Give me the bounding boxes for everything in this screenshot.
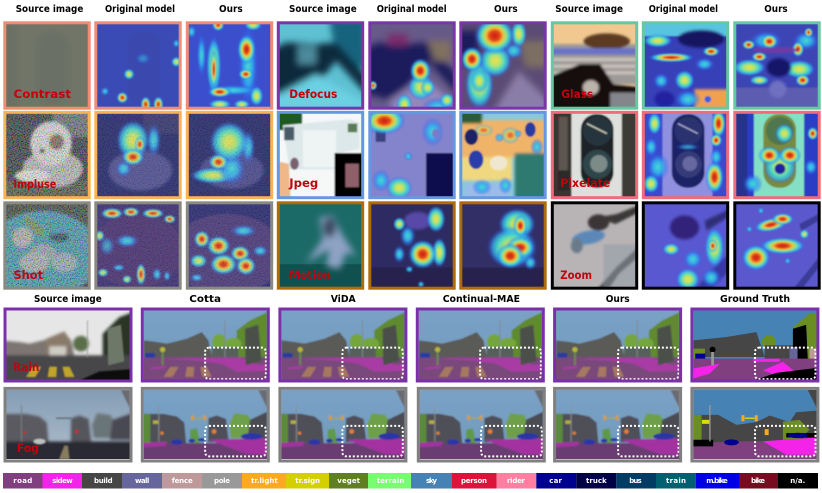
column headings: segmentation row: Continual-MAE [443, 294, 520, 305]
panel: glass source [547, 17, 642, 114]
panel: fog Continual-MAE [413, 383, 550, 466]
panel: contrast ours heatmap [182, 17, 277, 114]
panel: shot ours heatmap [170, 197, 284, 294]
panel: shot source [0, 197, 99, 298]
panel: shot original model heatmap [90, 197, 186, 294]
panel: jpeg ours heatmap [455, 107, 551, 203]
column headings: segmentation row: Ground Truth [720, 294, 790, 305]
panel: defocus source [270, 17, 370, 118]
panel: impulse original model heatmap [90, 107, 186, 203]
panel: fog Cotta [137, 383, 274, 466]
highlight box [618, 348, 679, 379]
legend: class colour bar: m.bike [706, 477, 728, 485]
label: Impluse: Impluse [14, 177, 56, 191]
legend: class colour bar [3, 473, 818, 488]
panel: defocus ours heatmap [455, 17, 552, 114]
legend: class colour bar: person [461, 477, 487, 485]
legend: class colour bar: terrain [377, 477, 404, 485]
label: Jpeg: Jpeg [288, 176, 318, 190]
highlight box [755, 426, 815, 456]
column headings: first panel set: Original model [105, 4, 175, 15]
column headings: segmentation row: ViDA [331, 294, 356, 305]
column headings: third panel set: Source image [555, 4, 623, 15]
panel: contrast original model heatmap [90, 17, 186, 114]
panel: motion ours heatmap [455, 197, 551, 294]
panel: motion original model heatmap [364, 197, 460, 294]
legend: class colour bar: pole [214, 477, 230, 485]
legend: class colour bar: road [13, 477, 32, 485]
panel: rain Continual-MAE [412, 304, 549, 387]
label: Fog: Fog [17, 441, 39, 455]
panel: rain Cotta [137, 304, 274, 387]
column headings: third panel set: Ours [764, 4, 788, 15]
panel: rain ViDA [275, 304, 411, 387]
highlight box [342, 348, 403, 379]
label: Shot: Shot [14, 268, 43, 282]
legend: class colour bar: wall [135, 477, 149, 485]
label: Glass: Glass [561, 87, 593, 101]
legend: class colour bar: sidew [52, 477, 73, 485]
highlight box [480, 348, 541, 379]
label: Contrast: Contrast [14, 87, 72, 101]
label: Zoom: Zoom [560, 268, 592, 282]
column headings: second panel set: Ours [494, 4, 518, 15]
panel: rain Ours [549, 304, 686, 387]
column headings: third panel set: Original model [649, 4, 718, 15]
label: Motion: Motion [289, 268, 331, 282]
legend: class colour bar: veget [337, 477, 361, 485]
legend: class colour bar: tr.light [251, 477, 278, 485]
highlight box [342, 426, 403, 456]
panel: motion source [273, 197, 368, 294]
column headings: first panel set: Ours [219, 4, 243, 15]
highlight box [755, 348, 815, 379]
highlight box [481, 426, 542, 456]
legend: class colour bar: tr.sign [295, 477, 320, 485]
label: Rain: Rain [13, 360, 39, 374]
legend: class colour bar: bike [751, 477, 765, 485]
panel: fog source [0, 383, 136, 466]
panel: zoom original model heatmap [638, 197, 733, 294]
panel: impulse source [0, 107, 95, 203]
legend: class colour bar: fence [172, 477, 193, 485]
column headings: third panel set [555, 4, 788, 15]
panel: pixelate source [547, 107, 642, 203]
panel: jpeg source [273, 107, 368, 203]
legend: class colour bar: n/a. [790, 477, 805, 485]
column headings: segmentation row: Cotta [189, 294, 221, 305]
legend: class colour bar: sky [426, 477, 437, 485]
panel: fog ViDA [275, 383, 411, 466]
column headings: second panel set [289, 4, 518, 15]
panel: glass original model heatmap [638, 17, 733, 114]
highlight box [205, 348, 266, 379]
panel: fog ground truth [692, 388, 818, 461]
legend: class colour bar: bus [629, 477, 642, 485]
column headings: segmentation row: Ours [606, 294, 630, 305]
panel: rain ground truth [692, 309, 818, 381]
panel: pixelate ours heatmap [729, 107, 822, 203]
panel: impulse ours heatmap [182, 107, 277, 203]
label: Pixelate: Pixelate [560, 176, 610, 190]
panel: glass ours heatmap [729, 17, 822, 114]
legend: class colour bar: truck [586, 477, 607, 485]
column headings: segmentation row [34, 294, 790, 305]
panel: zoom ours heatmap [729, 197, 822, 294]
panel: zoom source [547, 197, 642, 294]
panel: defocus original model heatmap [361, 17, 461, 118]
panel: contrast source [0, 14, 98, 117]
highlight box [618, 426, 679, 456]
column headings: second panel set: Original model [377, 4, 447, 15]
column headings: segmentation row: Source image [34, 294, 102, 305]
highlight box [205, 426, 266, 456]
panel: jpeg original model heatmap [363, 107, 460, 203]
legend: class colour bar: train [666, 477, 686, 485]
legend: class colour bar: car [549, 477, 563, 485]
column headings: first panel set: Source image [16, 4, 83, 15]
legend: class colour bar: rider [507, 477, 526, 485]
column headings: first panel set [16, 4, 243, 15]
panel: pixelate original model heatmap [638, 107, 733, 203]
panel: rain source [0, 304, 136, 387]
legend: class colour bar: build [94, 477, 113, 485]
column headings: second panel set: Source image [289, 4, 357, 15]
panel: fog Ours [549, 383, 686, 466]
label: Defocus: Defocus [289, 87, 337, 101]
